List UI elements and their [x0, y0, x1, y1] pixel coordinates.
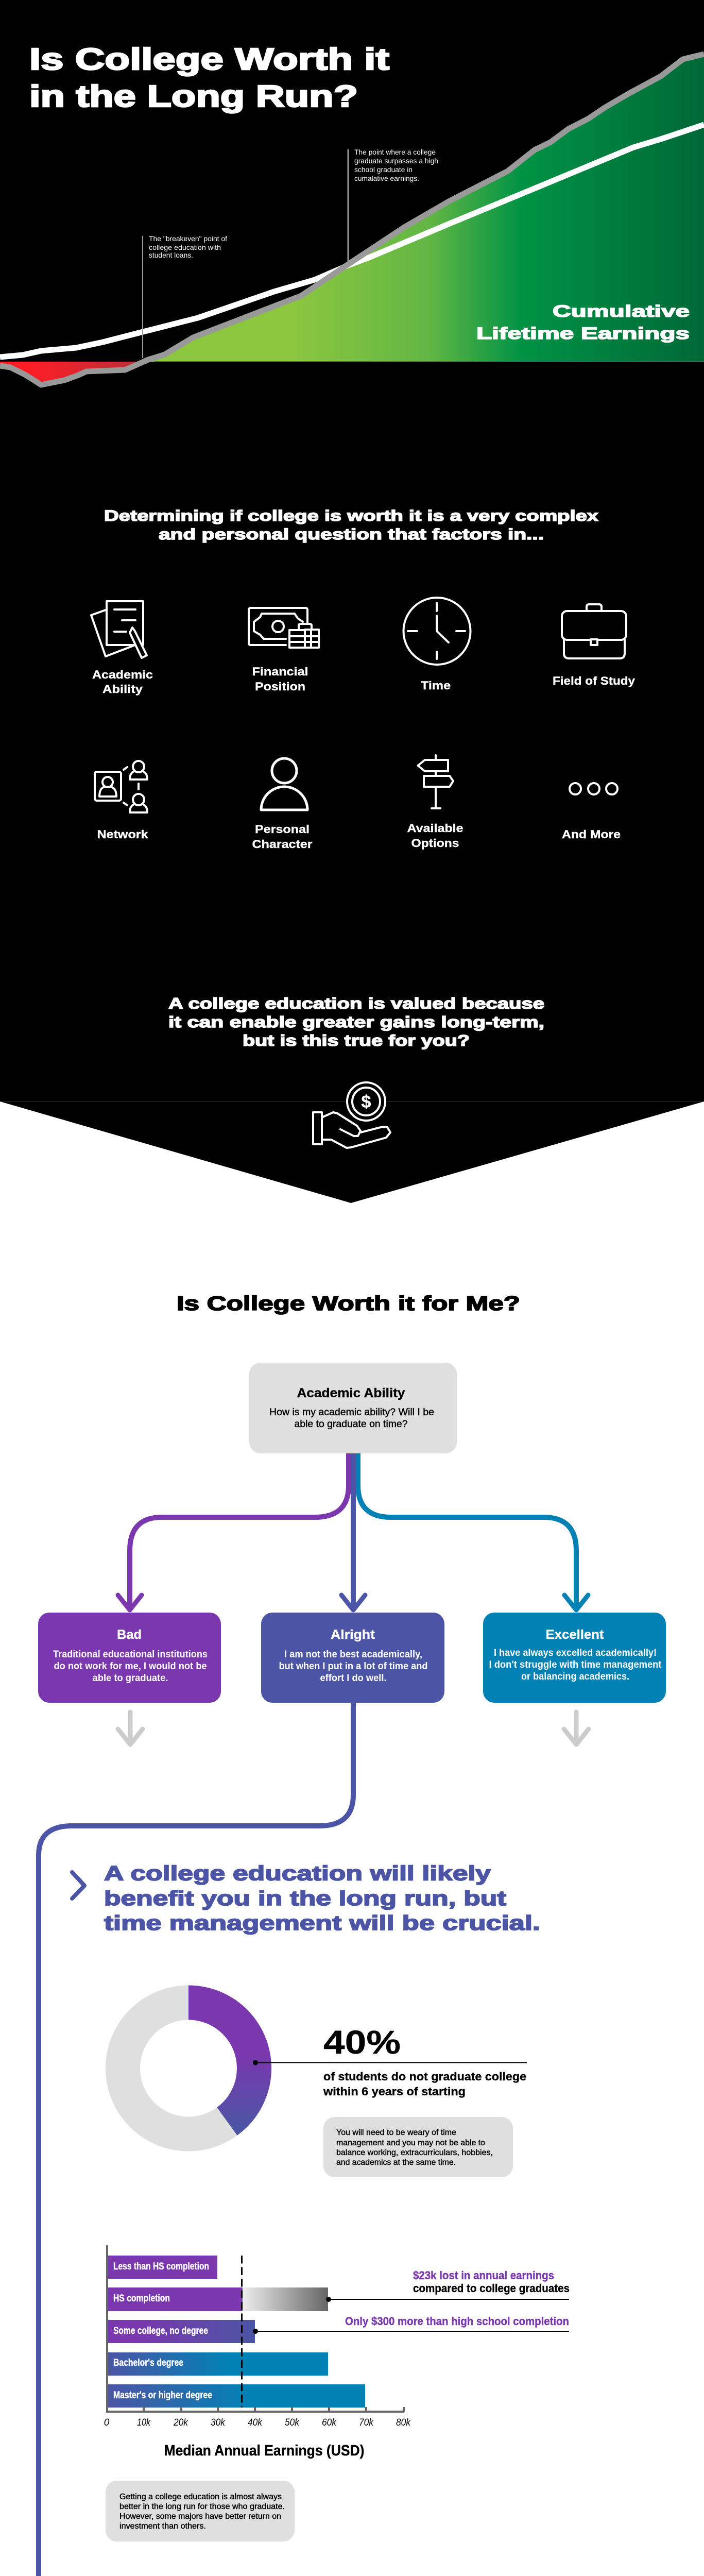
panel: alright: Alright	[331, 1628, 375, 1642]
label: financial position: Financial	[252, 665, 308, 678]
note: time management	[323, 2117, 513, 2177]
icon: clock	[404, 598, 471, 665]
axis labels	[104, 2417, 411, 2428]
callout: 23k lost: $23k lost in annual earnings	[413, 2269, 554, 2282]
bar: less than high school	[107, 2256, 217, 2279]
label: network: Network	[97, 828, 148, 841]
heading: college benefit: time management will be crucial.	[104, 1912, 540, 1935]
axis labels: 0	[104, 2417, 110, 2428]
panel: academic ability question: able to graduate on time?	[295, 1419, 408, 1430]
note: return on investment: Getting a college education is almost always	[119, 2493, 282, 2501]
callout: surpass point: school graduate in	[354, 165, 413, 174]
bar: bachelor's	[107, 2352, 328, 2376]
callout: surpass point: The point where a college	[354, 148, 436, 156]
text: value statement	[168, 994, 544, 1049]
axis title: Median Annual Earnings (USD)	[164, 2443, 365, 2459]
heading: is college worth it for me: Is College Worth it for Me?	[177, 1293, 520, 1315]
arrow: to alright	[341, 1453, 365, 1610]
panel: alright: effort I do well.	[320, 1673, 386, 1684]
callout: only 300 more	[253, 2315, 569, 2334]
label: personal character	[252, 823, 313, 851]
note: return on investment: However, some majors have better return on	[119, 2512, 281, 2521]
area: student loan deficit	[0, 362, 149, 385]
label: time: Time	[421, 679, 451, 692]
bar: master's: Master's or higher degree	[113, 2390, 212, 2401]
panel: bad	[38, 1613, 221, 1703]
callout line: 40 percent	[253, 2060, 527, 2065]
label: available options: Options	[411, 837, 459, 850]
axis labels: 50k	[285, 2417, 300, 2428]
heading: factors	[104, 507, 598, 543]
arrow: gray below bad	[118, 1712, 143, 1744]
note: time management: and academics at the same time.	[336, 2158, 456, 2167]
note: time management: balance working, extracurriculars, hobbies,	[336, 2148, 493, 2157]
bar: high school: HS completion	[113, 2293, 170, 2304]
callout: breakeven point: student loans.	[149, 251, 193, 259]
text: stat description: within 6 years of starting	[323, 2085, 466, 2098]
chart label: cumulative lifetime earnings	[476, 302, 690, 343]
bar: some college	[107, 2320, 255, 2343]
label: field of study: Field of Study	[553, 674, 636, 687]
label: academic ability: Ability	[102, 683, 143, 696]
icon: signpost	[418, 755, 453, 808]
stat: 40 percent: 40%	[323, 2024, 401, 2061]
icon: academic ability	[91, 601, 147, 658]
panel: alright: but when I put in a lot of time and	[279, 1661, 427, 1672]
bar: some college: Some college, no degree	[113, 2326, 208, 2336]
arrow: to bad	[118, 1453, 349, 1610]
icon: three dots	[570, 783, 617, 794]
text: value statement: it can enable greater gains long-term,	[168, 1013, 544, 1031]
bar: master's	[107, 2384, 365, 2408]
icon: hand holding coin: $	[362, 1092, 371, 1112]
connector: alright to money question	[39, 1703, 360, 2576]
label: personal character: Personal	[255, 823, 310, 836]
note: time management: You will need to be weary of time	[336, 2128, 456, 2137]
panel: bad: able to graduate.	[93, 1673, 168, 1684]
line: high school graduate earnings	[0, 125, 704, 357]
panel: value statement	[0, 994, 704, 1148]
panel: academic ability question: How is my academic ability? Will I be	[269, 1407, 434, 1418]
chart: donut 40 percent	[106, 1986, 271, 2151]
line: college graduate earnings	[0, 54, 704, 385]
axis labels: 40k	[248, 2417, 263, 2428]
icon: briefcase	[562, 604, 626, 658]
label: available options	[407, 822, 463, 850]
label: personal character: Character	[252, 838, 313, 851]
label: financial position: Position	[255, 680, 305, 693]
panel: excellent: I have always excelled academically!	[494, 1648, 657, 1658]
callout: surpass point: cumalative earnings.	[354, 174, 419, 182]
panel: excellent: I don't struggle with time management	[489, 1659, 662, 1670]
flowchart: academic ability connectors	[118, 1453, 588, 1610]
chart label: cumulative lifetime earnings: Cumulative	[553, 302, 690, 320]
heading: college benefit	[104, 1862, 540, 1935]
label: available options: Available	[407, 822, 463, 835]
panel: black intro background	[0, 0, 704, 1203]
text: value statement: A college education is valued because	[168, 994, 544, 1012]
icon: network	[95, 761, 147, 812]
panel: bad: Traditional educational institutions	[53, 1649, 208, 1660]
text: value statement: but is this true for you?	[243, 1031, 470, 1049]
bar: bachelor's: Bachelor's degree	[113, 2358, 183, 2368]
panel: hero	[0, 42, 704, 385]
panel: excellent: or balancing academics.	[521, 1671, 629, 1682]
axis labels: 80k	[396, 2417, 411, 2428]
chart: cumulative lifetime earnings	[0, 54, 704, 385]
label: and more: And More	[562, 828, 621, 841]
panel: alright: I am not the best academically,	[284, 1649, 422, 1660]
callout: surpass point	[348, 148, 438, 264]
callout: only 300 more: Only $300 more than high school completion	[345, 2315, 569, 2328]
panel: bad: do not work for me, I would not be	[54, 1661, 207, 1672]
callout: surpass point: graduate surpasses a high	[354, 157, 438, 165]
callout: 23k lost	[326, 2269, 570, 2302]
note: return on investment: investment than others.	[119, 2522, 206, 2531]
callout: breakeven point	[143, 234, 227, 358]
chart label: cumulative lifetime earnings: Lifetime Earnings	[476, 324, 690, 343]
area: college earnings gain	[148, 54, 704, 362]
heading: college benefit: benefit you in the long run, but	[104, 1887, 506, 1910]
label: academic ability	[92, 668, 153, 696]
icon: chevron	[72, 1872, 84, 1899]
panel: bad: Bad	[117, 1628, 142, 1642]
text: stat description: of students do not graduate college	[323, 2070, 526, 2083]
arrow: gray below excellent	[564, 1712, 589, 1744]
axis labels: 20k	[173, 2417, 188, 2428]
title	[29, 42, 389, 113]
panel: excellent: Excellent	[546, 1628, 604, 1642]
title: Is College Worth it	[29, 42, 389, 76]
callout: breakeven point: college education with	[149, 243, 221, 251]
panel: time management finding	[72, 1862, 570, 2541]
axis labels: 30k	[211, 2417, 226, 2428]
heading: factors: Determining if college is worth it is a very complex	[104, 507, 598, 524]
axis labels: 10k	[137, 2417, 151, 2428]
callout: 23k lost: compared to college graduates	[413, 2282, 570, 2295]
axes	[106, 2245, 404, 2413]
arrow: to excellent	[358, 1453, 588, 1610]
bar: high school	[107, 2287, 328, 2311]
icon: hand holding coin	[0, 1082, 704, 1148]
heading: college benefit: A college education will likely	[104, 1862, 491, 1885]
note: return on investment: better in the long run for those who graduate.	[119, 2502, 285, 2511]
axis: chart baseline	[154, 361, 704, 362]
panel: academic ability question: Academic Ability	[297, 1386, 405, 1400]
label: financial position	[252, 665, 308, 693]
line: high school median	[241, 2256, 243, 2408]
title: in the Long Run?	[29, 79, 358, 113]
note: return on investment	[106, 2481, 295, 2541]
callout: breakeven point: The "breakeven" point of	[149, 234, 227, 243]
chart: median annual earnings	[104, 2245, 570, 2459]
icon: financial position	[249, 608, 319, 648]
panel: academic ability question	[249, 1363, 457, 1453]
bar: less than high school: Less than HS completion	[113, 2261, 209, 2272]
label: academic ability: Academic	[92, 668, 153, 681]
panel: alright	[261, 1613, 444, 1703]
axis labels: 70k	[359, 2417, 374, 2428]
note: time management: management and you may not be able to	[336, 2139, 485, 2147]
panel: excellent	[483, 1613, 666, 1703]
icon: person	[261, 758, 307, 810]
panel: factors	[91, 507, 636, 851]
text: stat description	[323, 2070, 526, 2098]
axis labels: 60k	[322, 2417, 337, 2428]
heading: factors: and personal question that factors in...	[159, 526, 544, 543]
